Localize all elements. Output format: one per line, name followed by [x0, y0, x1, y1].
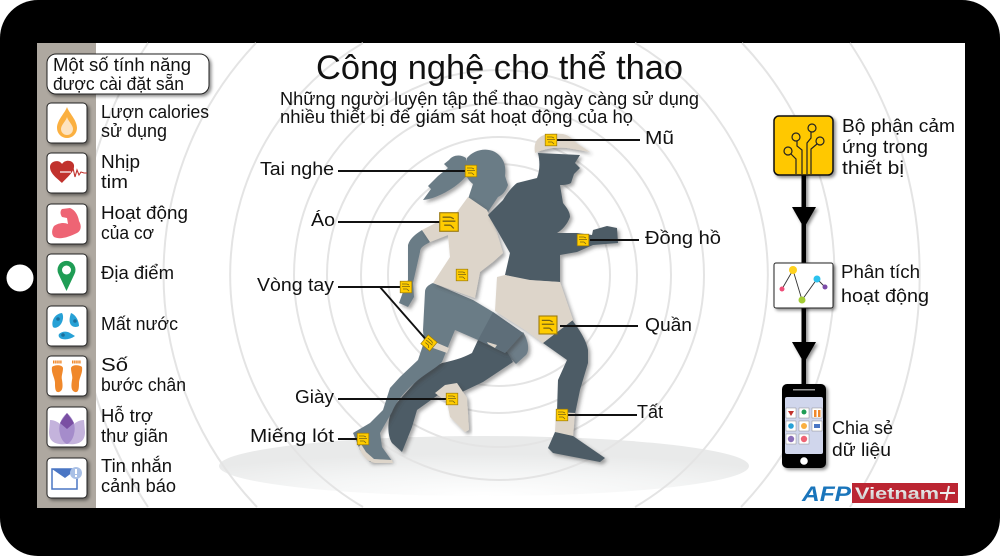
text: share data: [832, 417, 893, 460]
man front leg: [543, 320, 588, 414]
woman front leg: [353, 283, 523, 462]
title: Công nghệ cho thể thao: [316, 49, 683, 87]
feature: relaxation: Hỗ trợ: [101, 405, 153, 426]
runner labels: Tất: [637, 401, 663, 422]
icon: activity analysis: [774, 263, 833, 308]
feature: heart rate: Nhịp: [101, 151, 140, 172]
feature: location: [47, 254, 174, 294]
man cap: [535, 134, 590, 153]
feature: muscle: Hoạt động: [101, 202, 188, 223]
woman ponytail: [423, 156, 468, 200]
man shoe: [548, 432, 605, 462]
feature: muscle: của cơ: [101, 222, 154, 243]
feature: steps: Số: [101, 354, 128, 375]
feature: relaxation: [47, 405, 168, 447]
woman shirt: [422, 197, 503, 298]
woman rear knee: [505, 332, 528, 364]
runner labels: Mũ: [645, 127, 674, 148]
icon: sensor chip: [774, 116, 833, 175]
feature: calories: [47, 101, 209, 143]
runner: man: [488, 134, 618, 462]
runner labels: Vòng tay: [257, 274, 335, 295]
concentric signal rings: [78, 43, 920, 507]
ground shadow: [219, 436, 749, 496]
panel: preset features header: Một số tính năng: [53, 55, 191, 75]
woman shoe: [435, 383, 469, 432]
man shorts: [495, 275, 573, 343]
woman arm: [399, 230, 430, 307]
text: analysis: Phân tích: [841, 261, 920, 282]
feature: heart rate: tim: [101, 171, 128, 192]
logo: AFP Vietnam+: Vietnam: [855, 484, 939, 503]
feature: alert message: [47, 455, 176, 498]
feature: calories: sử dụng: [101, 120, 167, 141]
text: analysis: hoạt động: [841, 285, 929, 306]
sensors on runners: [357, 134, 589, 445]
woman head: [465, 150, 508, 212]
subtitle: [280, 88, 699, 127]
feature: steps: bước chân: [101, 374, 186, 395]
logo: AFP Vietnam+: AFP: [801, 483, 852, 506]
runner labels: Miếng lót: [250, 425, 334, 446]
icon: smartphone: [782, 384, 826, 468]
logo: AFP Vietnam+: [801, 483, 958, 506]
man sock: [555, 412, 575, 437]
feature: dehydration: [47, 306, 178, 346]
subtitle: Những người luyện tập thể thao ngày càng sử dụng: [280, 88, 699, 109]
text: sensor: ứng trong: [842, 136, 928, 157]
runner labels: [250, 127, 721, 446]
runner labels: Đồng hồ: [645, 227, 721, 248]
woman knee band: [433, 342, 449, 353]
feature: alert message: cảnh báo: [101, 475, 176, 496]
woman insole: [359, 444, 393, 463]
panel: preset features header: được cài đặt sẵn: [53, 74, 184, 94]
subtitle: nhiều thiết bị để giám sát hoạt động của họ: [280, 106, 633, 127]
callout lines: [338, 140, 640, 439]
screen panel: [37, 43, 965, 508]
sidebar background: [37, 43, 96, 508]
runner labels: Áo: [311, 209, 335, 230]
runner labels: Giày: [295, 386, 335, 407]
man body and arm: [488, 153, 618, 282]
text: sensor: Bộ phận cảm: [842, 115, 955, 136]
home button: [6, 264, 34, 292]
feature: heart rate: [47, 151, 140, 193]
text: sensor: [842, 115, 955, 178]
feature: relaxation: thư giãn: [101, 425, 168, 446]
text: sensor: thiết bị: [842, 157, 904, 178]
panel: preset features header: [47, 54, 209, 94]
flow connector with arrows: [792, 170, 816, 388]
runner labels: Quần: [645, 314, 692, 335]
woman thigh overlap: [478, 312, 523, 353]
panel: features list: [47, 101, 209, 498]
text: share data: Chia sẻ: [832, 417, 893, 438]
text: analysis: [841, 261, 929, 306]
feature: alert message: Tin nhắn: [101, 455, 172, 476]
man rear leg: [388, 340, 513, 452]
text: share data: dữ liệu: [832, 439, 891, 460]
beige strip: [487, 342, 497, 348]
feature: steps: [47, 354, 186, 396]
feature: dehydration: Mất nước: [101, 313, 178, 334]
runner: woman: [399, 150, 528, 364]
feature: location: Địa điểm: [101, 262, 174, 283]
feature: muscle: [47, 202, 188, 244]
runner labels: Tai nghe: [260, 158, 334, 179]
feature: calories: Lượn calories: [101, 101, 209, 122]
